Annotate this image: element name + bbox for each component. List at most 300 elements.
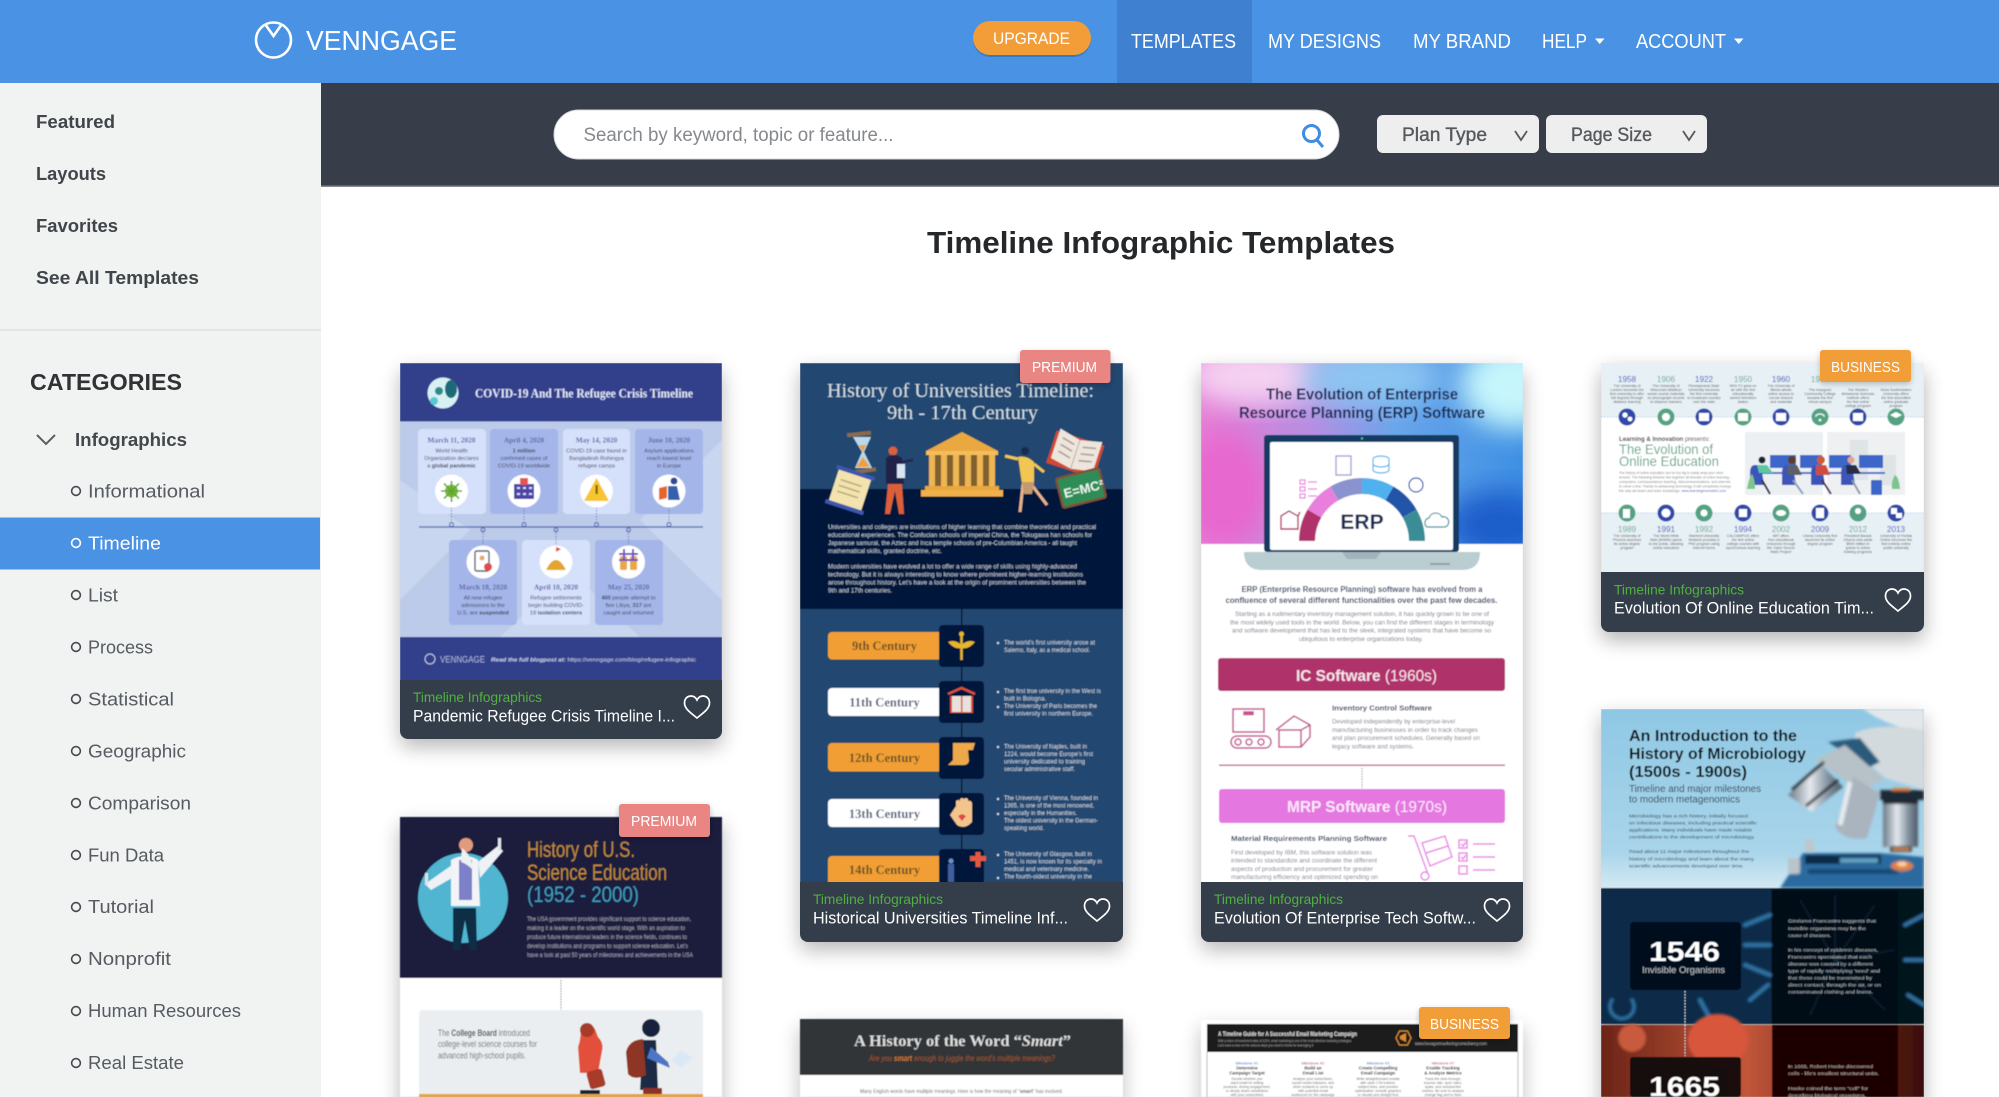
inventory control text — [1332, 704, 1480, 750]
panel: 1665: Hooke coined the term "cell" for — [1788, 1086, 1868, 1092]
nav links: ACCOUNT — [1636, 30, 1726, 53]
card 5 thumbnail — [400, 817, 722, 1097]
century labels: 12th Century — [849, 751, 921, 765]
nav links: MY DESIGNS — [1268, 30, 1381, 53]
nav links: HELP — [1542, 30, 1587, 53]
milestone text top: Behavioral Sciences — [1842, 392, 1874, 396]
badge: business: BUSINESS — [1430, 1016, 1499, 1033]
milestone text top: The University of — [1614, 384, 1640, 388]
category list: Real Estate — [88, 1052, 184, 1073]
panel: 1546: that these could be transmitted by — [1788, 976, 1873, 982]
intro text: confluence of several different functionalities over the past few decades. — [1226, 595, 1498, 605]
icon: megaphone hexagon — [1396, 1031, 1411, 1045]
plan type filter: Plan Type — [1402, 125, 1487, 146]
milestone text top: Wisconsin-Madison — [1650, 388, 1682, 392]
material requirements text: intended to standardize and coordinate the different — [1231, 858, 1377, 864]
card: history of the word smart — [800, 1019, 1123, 1097]
event descriptions: reach lowest level — [647, 456, 691, 462]
years bottom: 1989 — [1618, 525, 1637, 534]
card 3 thumbnail: the most widely used tools in the world. Below, you can find the different stages in terminology — [1230, 620, 1495, 626]
milestone text bottom: Ware Project' — [1770, 550, 1792, 554]
heading: Online Education — [1619, 453, 1719, 469]
hero gradient background — [1201, 363, 1523, 545]
milestone columns: Track the click-through, — [1425, 1077, 1461, 1081]
intro text: ERP (Enterprise Resource Planning) software has evolved from a — [1242, 584, 1483, 594]
century labels: 11th Century — [849, 696, 920, 710]
heading: Science Education — [527, 860, 667, 885]
milestone text bottom: PhD program using — [1689, 542, 1719, 546]
event dates: June 10, 2020 — [648, 436, 691, 444]
milestone columns: Decide whether you — [1232, 1077, 1263, 1081]
sidebar top links: Layouts — [36, 163, 106, 184]
milestone text top — [1610, 384, 1911, 408]
milestone text top: The Western — [1848, 388, 1868, 392]
heading: History of Microbiology — [1629, 746, 1806, 763]
years bottom: 2009 — [1811, 525, 1830, 534]
nav links: MY BRAND — [1413, 30, 1511, 53]
icon: heart — [1484, 899, 1510, 921]
years bottom: 1991 — [1657, 525, 1676, 534]
card 3 thumbnail — [1201, 363, 1523, 882]
years top: 1960 — [1772, 375, 1791, 384]
heading: The Evolution of — [1619, 441, 1713, 457]
milestone columns: & Analyze Metrics — [1424, 1070, 1462, 1076]
milestone columns: Create Compelling — [1359, 1066, 1398, 1070]
event descriptions: caught and returned — [603, 610, 654, 616]
milestone text top: University becomes — [1688, 388, 1720, 392]
milestone columns: or simply share newsletters — [1226, 1089, 1268, 1093]
milestone text top: The University of — [1768, 384, 1794, 388]
card: covid refugee timeline — [400, 363, 722, 747]
badge: premium: PREMIUM — [1032, 359, 1097, 376]
milestone text top: The University of — [1653, 384, 1679, 388]
years top: 1958 — [1618, 375, 1637, 384]
century icons — [939, 625, 986, 891]
inventory control text: and plan procurement schedules. Generally based on — [1332, 735, 1480, 742]
century descriptions — [997, 640, 1102, 880]
event descriptions: flee Libya, 317 are — [605, 603, 652, 609]
intro text: applications. Many individuals have made notable — [1629, 828, 1752, 834]
sidebar — [0, 83, 321, 1097]
milestone text top: to broadcast courses — [1687, 396, 1721, 400]
heading: The history of online education can be too big to easily wrap your mind — [1619, 470, 1723, 475]
material requirements text: Material Requirements Planning Software — [1231, 834, 1387, 843]
milestone columns: with clear CTA buttons, — [1360, 1081, 1396, 1085]
card 7 thumbnail: With a return of investment rates of 122%, email marketing is one of the most effective marketing strategies. — [1218, 1038, 1352, 1043]
milestone icons top — [1618, 408, 1904, 426]
milestone text top: educationally — [1733, 392, 1754, 396]
milestone text bottom: President Barack — [1844, 534, 1872, 538]
mrp software banner — [1219, 789, 1505, 823]
intro text: Microbiology has a rich history, initially focused — [1629, 814, 1748, 820]
material requirements text: aspects of production and procurement for greater — [1231, 866, 1373, 873]
event descriptions: Bangladesh Rohingya — [569, 456, 625, 462]
milestone columns: other contacts to come up — [1293, 1085, 1333, 1089]
milestone text top: to distance learners — [1650, 400, 1682, 404]
nav links — [1131, 30, 1744, 53]
inventory control text: Inventory Control Software — [1332, 704, 1432, 712]
milestone columns: social media followers, and — [1292, 1081, 1334, 1085]
card: evolution of online education — [1601, 350, 1924, 640]
card 6 thumbnail: Are you smart enough to juggle the word's multiple meanings? — [868, 1054, 1055, 1063]
inventory control text: Developed independently by enterprise-level — [1332, 718, 1455, 726]
milestone columns: Determine — [1236, 1066, 1258, 1070]
milestone columns: audiences for the campaign — [1292, 1093, 1335, 1097]
milestone text top: air with the first — [1731, 388, 1755, 392]
milestone columns: Enable Tracking — [1426, 1066, 1460, 1070]
upgrade button — [973, 21, 1091, 57]
heading: to name a few. Thanks to advancing technology, it will completely change — [1619, 484, 1731, 488]
century descriptions: speaking world. — [1004, 826, 1044, 832]
icon: search — [1304, 126, 1323, 147]
heading: Resource Planning (ERP) Software — [1239, 405, 1485, 422]
intro text: technology. But it is always interesting to know where prominent higher-learning institutions — [828, 572, 1083, 578]
milestone columns — [1223, 1060, 1464, 1097]
category list: Comparison — [88, 792, 191, 814]
milestone text bottom: program — [1620, 546, 1634, 550]
card: history of microbiology — [1601, 709, 1924, 1097]
century labels: 14th Century — [849, 863, 921, 877]
milestone icons bottom — [1618, 504, 1904, 522]
milestone columns: with potential email — [1298, 1089, 1328, 1093]
milestone columns: Milestone #3 — [1367, 1060, 1390, 1066]
milestone text top: first university to offer — [1610, 392, 1645, 396]
illustration: microscope — [1780, 709, 1924, 888]
years bottom: 2012 — [1849, 525, 1868, 534]
intro text: Read about 11 major milestones throughout the — [1629, 849, 1749, 855]
milestone columns: optimization. Include graphics — [1355, 1089, 1401, 1093]
category list: Statistical — [88, 688, 174, 710]
milestone text top: Illinois allows — [1771, 388, 1792, 392]
illustration: students — [578, 1019, 693, 1097]
milestone columns: Email List — [1303, 1070, 1324, 1076]
card 3 thumbnail: and software development that has led to the sleek, integrated systems that have become so — [1232, 628, 1491, 634]
timeline axis — [419, 507, 703, 546]
heading: COVID-19 And The Refugee Crisis Timeline — [475, 386, 693, 400]
card 4 footer — [1601, 572, 1924, 632]
card 4 thumbnail — [1601, 363, 1924, 575]
panel: 1546: cause of diseases. — [1788, 933, 1831, 939]
event descriptions: COVID-19 case found in — [566, 448, 627, 454]
card 1 thumbnail — [400, 363, 722, 683]
century descriptions: first university in northern Europe. — [1004, 712, 1093, 718]
heading — [827, 380, 1094, 424]
sidebar top links: See All Templates — [36, 267, 199, 288]
card 2 footer — [800, 882, 1123, 942]
milestone text bottom: first entirely online — [1882, 542, 1910, 546]
intro text: develop institutions and programs to support science education. Let's — [527, 943, 688, 950]
heading: the way we teach and learn knowledge. www.learninginnovation.com — [1619, 488, 1726, 493]
milestone text top: college program — [1845, 404, 1871, 408]
intro text: scientific advancements developed over time. — [1629, 864, 1744, 870]
top navigation bar — [0, 0, 1999, 83]
illustration: laptop — [1244, 435, 1480, 570]
illustration: temple — [921, 432, 1003, 496]
search box — [554, 110, 1339, 159]
years bottom: 2002 — [1772, 525, 1791, 534]
heading: computers, correspondence learning, telecommunications, and internet, — [1619, 479, 1731, 484]
years top: 1965 — [1811, 375, 1830, 384]
event dates: May 14, 2020 — [576, 436, 618, 444]
century descriptions: secular administrative staff. — [1004, 767, 1075, 773]
milestone text bottom: degree program — [1807, 542, 1833, 546]
chart: erp arc: ERP — [1340, 511, 1384, 534]
subheading: to modern metagenomics — [1629, 794, 1740, 806]
card: historical universities timeline — [800, 350, 1123, 950]
milestone text top: the first university — [1690, 392, 1718, 396]
century descriptions: medical and veterinary medicine. — [1004, 867, 1089, 873]
search box: Search by keyword, topic or feature... — [584, 125, 894, 146]
badge: premium — [619, 804, 710, 839]
mrp software banner: MRP Software (1970s) — [1287, 799, 1447, 816]
event descriptions: confirmed cases of — [501, 456, 548, 462]
panel: 1546: disease was caused by a different — [1788, 962, 1874, 968]
milestone columns: products, driving engagement, — [1223, 1085, 1271, 1089]
category list: Geographic — [88, 740, 186, 762]
card 1 footer: Timeline Infographics — [413, 689, 542, 705]
milestone text top: and materials — [1770, 400, 1792, 404]
intro text: history of microbiology and learn about the many — [1629, 856, 1755, 862]
milestone columns: Milestone #7 — [1432, 1060, 1455, 1066]
century descriptions: 1451, is now known for its specialty in — [1004, 860, 1102, 866]
footer strip — [425, 654, 696, 664]
heading: (1500s - 1900s) — [1629, 764, 1747, 781]
sidebar top links — [36, 111, 199, 288]
card 6 thumbnail: A History of the Word “ Smart” — [854, 1033, 1071, 1050]
category list: Informational — [88, 480, 205, 502]
milestone columns: or visuals and straight text — [1358, 1093, 1398, 1097]
panel: 1546: In his concept of epidemic diseases, — [1788, 948, 1878, 954]
card 4 footer: Timeline Infographics — [1614, 582, 1744, 598]
milestone text bottom: $500 million in — [1847, 542, 1869, 546]
event descriptions: admissions to the — [461, 603, 505, 609]
milestone columns: Campaign Target — [1229, 1070, 1265, 1076]
milestone text bottom — [1613, 534, 1912, 554]
categories heading: CATEGORIES — [30, 369, 182, 395]
milestone text top: over the radio — [1693, 400, 1715, 404]
milestone text top: station — [1738, 400, 1748, 404]
milestone text bottom: Web (WWW) opens — [1650, 538, 1682, 542]
event descriptions: refugee camps — [578, 464, 615, 470]
heading — [527, 837, 667, 907]
card: enterprise resource planning — [1190, 360, 1534, 962]
panel: college board: college-level science courses for — [438, 1039, 538, 1050]
milestone text top: online access to — [1768, 392, 1794, 396]
card: email marketing campaign timeline — [1201, 1007, 1523, 1097]
icon: globe virus — [428, 378, 458, 408]
event descriptions: 19 isolation centers — [530, 610, 582, 616]
category list: Fun Data — [88, 844, 165, 866]
ic software banner — [1218, 658, 1505, 691]
illustration: scroll — [825, 465, 875, 515]
milestone text top: became the first — [1807, 396, 1833, 400]
intro text: produce future international leaders in the science fields, continues to — [527, 934, 688, 941]
material requirements text: First developed by IBM, this software solution was — [1231, 850, 1372, 856]
illustration: book — [1046, 428, 1105, 478]
milestone text top: online graduate — [1884, 400, 1908, 404]
ic software icons — [1231, 709, 1310, 748]
plan type filter — [1377, 115, 1539, 153]
event descriptions: World Health — [435, 448, 468, 454]
years top: 1950 — [1734, 375, 1753, 384]
years bottom: 2013 — [1887, 525, 1906, 534]
century descriptions: The fourth-oldest university in the — [1004, 874, 1093, 880]
years bottom: 1992 — [1695, 525, 1714, 534]
infographics group heading: Infographics — [75, 429, 187, 450]
century descriptions: The world's first university arose at — [1004, 640, 1095, 646]
milestone text top: Pennsylvania State — [1689, 384, 1719, 388]
illustration: chalkboard — [1056, 468, 1107, 508]
sidebar top links: Favorites — [36, 215, 118, 236]
milestone text bottom: to the public, allowing — [1649, 542, 1683, 546]
card 6 thumbnail: Many English words have multiple meanings. Here is how the meaning of "smart" has evolved. — [860, 1089, 1063, 1095]
century descriptions: Salerno, Italy, as a medical school. — [1004, 648, 1090, 654]
intro text: Modern universities have evolved a lot to offer a wide range of skills using highly-advanced — [828, 564, 1078, 570]
milestone text top: Community College — [1804, 392, 1836, 396]
century descriptions: The University of Glasgow, built in — [1004, 852, 1092, 858]
chart: erp arc — [1307, 486, 1417, 541]
panel: 1546: Invisible Organisms — [1642, 965, 1726, 975]
panel: 1546 — [1601, 888, 1924, 1056]
laptop icons — [1281, 456, 1449, 529]
intro text — [828, 524, 1096, 594]
panel: college board: advanced high-school pupils. — [438, 1050, 526, 1062]
event descriptions: Asylum applications — [644, 448, 694, 454]
card 6 thumbnail — [800, 1019, 1123, 1097]
card 7 thumbnail — [1201, 1020, 1523, 1097]
milestone text top: WOI-TV goes on — [1730, 384, 1756, 388]
footer strip: VENNGAGE — [440, 654, 485, 664]
event descriptions: 1 million — [513, 448, 536, 454]
milestone text top: University offers — [1883, 392, 1909, 396]
milestone text bottom: The World Wide — [1653, 534, 1679, 538]
event descriptions: 400 people attempt to — [601, 596, 656, 602]
card 3 thumbnail: ubiquitous to enterprise organizations today. — [1299, 636, 1423, 643]
milestone columns: Email Campaign — [1361, 1070, 1395, 1076]
page size filter: Page Size — [1571, 125, 1652, 146]
century labels — [828, 632, 943, 886]
intro text — [1629, 814, 1758, 870]
material requirements text — [1231, 834, 1387, 881]
milestone text bottom: Internet forms — [1693, 546, 1715, 550]
card 7 thumbnail: www.hexagonmarketingconsultancy.com — [1415, 1041, 1487, 1046]
intro text: on infectious diseases, including practical scientific — [1629, 820, 1758, 826]
card 1 footer — [400, 680, 722, 739]
milestone text bottom: CALCAMPUS offers — [1727, 534, 1759, 538]
milestone text top: on phonograph records — [1647, 396, 1685, 400]
panel: college board: The College Board introduced — [438, 1028, 530, 1039]
event dates — [428, 436, 691, 592]
milestone columns: spam, and unsubscribe — [1425, 1085, 1461, 1089]
selected row: timeline — [0, 518, 320, 570]
subheading: Timeline and major milestones — [1629, 784, 1761, 795]
illustration: lecturer — [885, 446, 913, 514]
subheading — [1629, 784, 1761, 806]
milestone text top: Nova Southeastern — [1881, 388, 1911, 392]
years bottom — [1618, 525, 1906, 534]
card 2 thumbnail — [800, 363, 1123, 891]
milestone text top: the first online — [1847, 400, 1869, 404]
intro text: Universities and colleges are institutions of higher learning that combine theoretical and practical — [828, 524, 1096, 531]
icon: venngage logo — [256, 22, 291, 58]
illustration: running student — [1005, 447, 1047, 512]
milestone columns: Build an — [1304, 1066, 1322, 1070]
century descriptions: 1365, is one of the most renowned, — [1004, 804, 1094, 810]
search toolbar — [321, 83, 1999, 187]
intro text: educational experiences. The Confucian schools of imperial China, the Tokugawa han schools for — [828, 532, 1092, 539]
heading: around. The following timeline ties together all threads of online learning - — [1619, 474, 1732, 480]
panel: 1665: In 1665, Robert Hooke discovered — [1788, 1064, 1873, 1070]
event dates: May 25, 2020 — [608, 582, 650, 592]
ic software banner: IC Software (1960s) — [1296, 668, 1437, 685]
panel: 1546: Francastro speculated that each — [1788, 954, 1872, 960]
event dates: March 18, 2020 — [459, 582, 507, 592]
milestone text top: the first accredited — [1881, 396, 1911, 400]
milestone text bottom: Network provides a — [1689, 538, 1719, 542]
category list: Nonprofit — [88, 948, 171, 969]
event descriptions: in Europe — [657, 464, 681, 470]
event dates: April 4, 2020 — [504, 436, 545, 444]
heading: (1952 - 2000) — [527, 882, 639, 907]
badge: business — [1820, 350, 1911, 384]
milestone text bottom: the first online — [1732, 538, 1754, 542]
upgrade button: UPGRADE — [993, 30, 1070, 48]
milestone text top: full degrees through — [1611, 396, 1643, 400]
milestone columns: Milestone #2 — [1302, 1060, 1325, 1066]
event descriptions: Refugee settlements — [530, 596, 582, 602]
intro text: arose throughout history. Let's have a look at the origin of prominent universities between the — [828, 580, 1087, 586]
badge: premium: PREMIUM — [631, 813, 697, 830]
intro text: The USA government provides significant support to science education, — [527, 916, 691, 923]
milestone columns: with your subscribers — [1231, 1093, 1264, 1097]
milestone text bottom: its online degree — [1614, 542, 1640, 546]
panel: college board — [419, 1010, 703, 1097]
card 3 footer: Timeline Infographics — [1214, 891, 1343, 907]
icon: heart — [684, 696, 710, 718]
years bottom: 1994 — [1734, 525, 1753, 534]
category list: Human Resources — [88, 1000, 241, 1021]
card 3 footer: Evolution Of Enterprise Tech Softw... — [1214, 910, 1476, 928]
sidebar top links: Featured — [36, 111, 115, 132]
century descriptions: The oldest university in the German- — [1004, 818, 1098, 824]
material requirements text: manufacturing efficiency and optimized spending on — [1231, 874, 1378, 881]
nav links: TEMPLATES — [1131, 30, 1236, 53]
heading: Learning & Innovation presents: — [1619, 436, 1710, 443]
heading: History of U.S. — [527, 837, 635, 862]
heading — [1239, 386, 1485, 422]
milestone text bottom: launched its online — [1805, 538, 1835, 542]
intro text: making it a leader on the scientific world stage. With an aspiration to — [527, 925, 686, 932]
heading: 9th - 17th Century — [887, 402, 1038, 424]
milestone text bottom: college courses with — [1727, 542, 1759, 546]
century descriptions: The University of Paris becomes the — [1004, 704, 1098, 710]
heading — [1629, 728, 1806, 781]
panel: 1546: Girolamo Francastro suggests that — [1788, 918, 1877, 924]
illustration: scientist — [418, 838, 508, 950]
milestone columns: subject lines, and preview — [1358, 1085, 1399, 1089]
card 7 thumbnail: A Timeline Guide for A Successful Email Marketing Campaign — [1218, 1031, 1357, 1038]
intro text — [527, 916, 694, 959]
milestone text bottom: online education — [1653, 546, 1679, 550]
milestone text bottom: Online becomes the — [1880, 538, 1912, 542]
milestone text top: course lessons — [1769, 396, 1793, 400]
intro text: contributions to the development of microbiology. — [1629, 834, 1755, 840]
milestone text bottom: University of Florida — [1880, 534, 1912, 538]
event descriptions: U.S. are suspended — [457, 610, 509, 616]
century descriptions: The University of Vienna, founded in — [1004, 796, 1098, 802]
milestone text bottom: synchronous learning — [1726, 546, 1760, 550]
card 2 footer: Timeline Infographics — [813, 891, 943, 907]
